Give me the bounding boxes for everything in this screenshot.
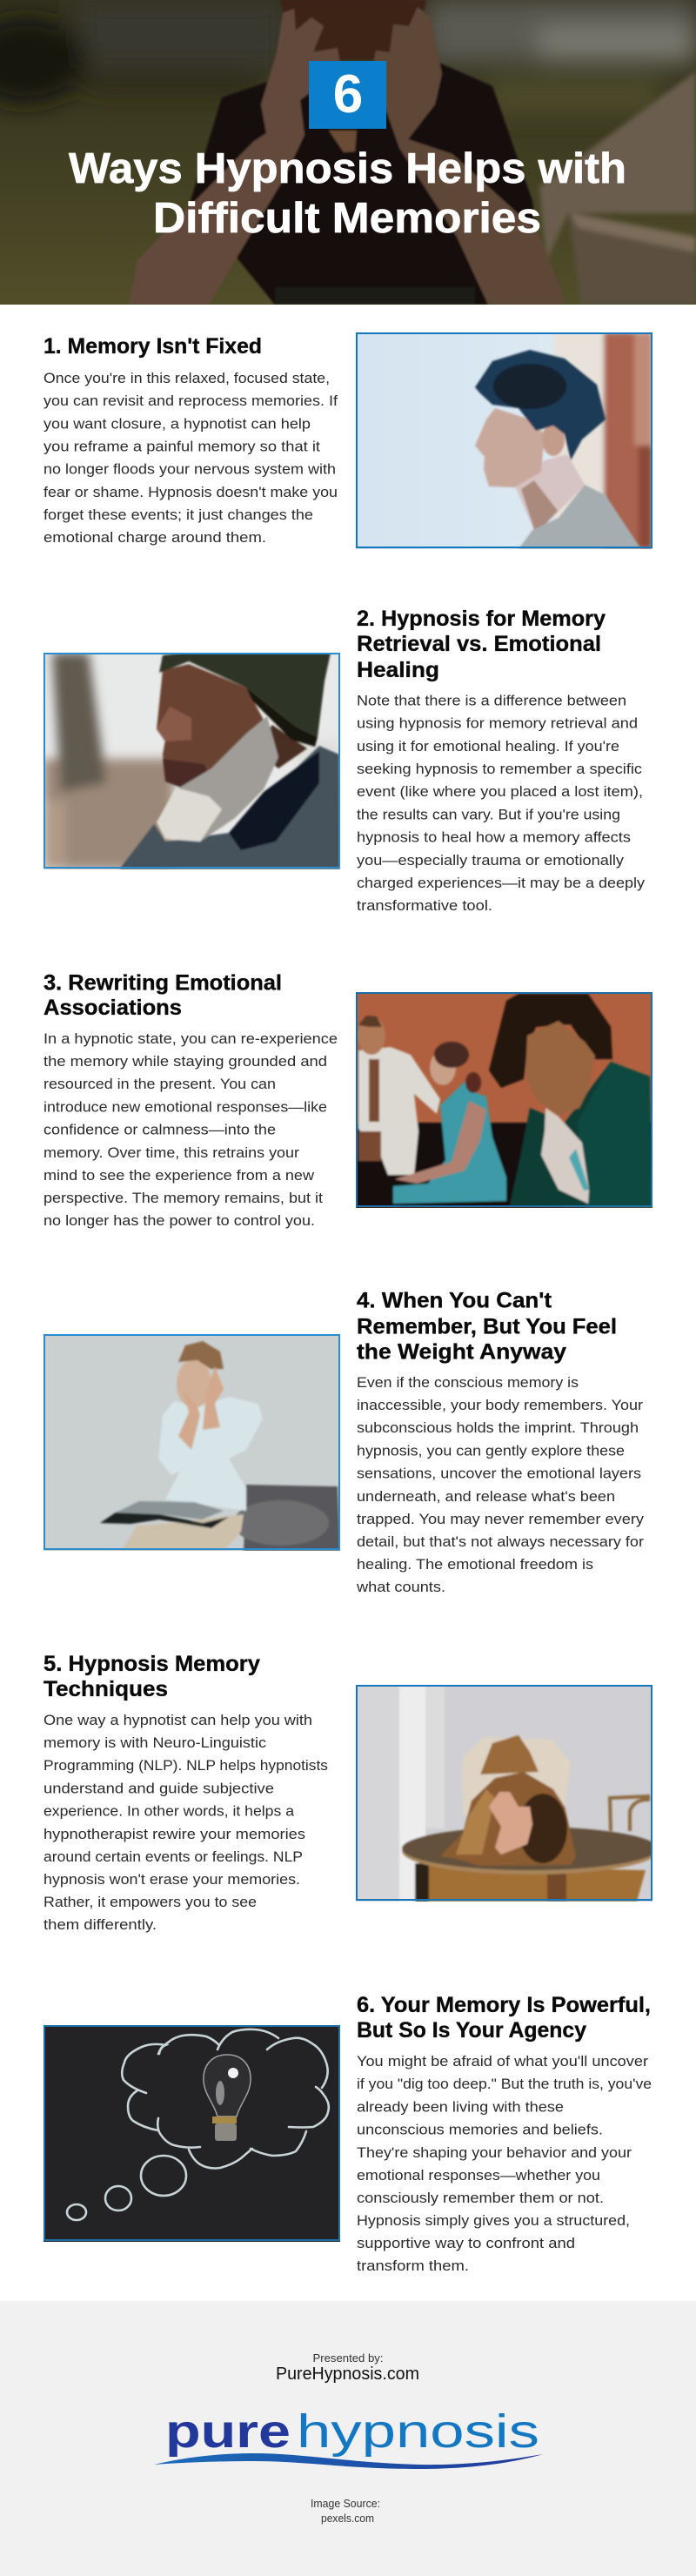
body text 5: them differently. [44,1916,157,1933]
photo: woman with head down on a table [356,1685,658,1902]
body text 3 [44,1030,338,1229]
body text 4: inaccessible, your body remembers. Your [357,1397,643,1413]
title: Difficult Memories [153,195,541,242]
heading 4: Remember, But You Feel [357,1314,617,1338]
body text 6: emotional responses—whether you [357,2167,600,2184]
body text 6 [357,2053,652,2274]
body text 2: the results can vary. But if you're using [357,806,620,822]
heading 5: 5. Hypnosis Memory [44,1652,260,1676]
heading 1: 1. Memory Isn't Fixed [44,334,262,359]
body text 5: experience. In other words, it helps a [44,1803,295,1820]
body text 3: the memory while staying grounded and [44,1053,327,1070]
body text 6: unconscious memories and beliefs. [357,2122,603,2138]
panel: section 3 [44,971,652,1229]
header photo: man holding his head [0,0,696,305]
number badge: 6 [333,64,363,124]
body text 1: you can revisit and reprocess memories. If [44,392,338,409]
body text 5 [44,1712,328,1933]
presented by text [276,2351,419,2384]
heading 3 [44,971,282,1020]
body text 3: In a hypnotic state, you can re-experience [44,1030,338,1047]
title: Ways Hypnosis Helps with [69,145,626,192]
body text 1: Once you're in this relaxed, focused state, [44,370,330,386]
body text 5: Rather, it empowers you to see [44,1894,257,1910]
photo: older man with grey beard [44,653,340,869]
body text 6: already been living with these [357,2098,564,2115]
logo: purehypnosis: hypnosis [297,2405,539,2458]
icon: light bulb [204,2055,251,2141]
photo: woman reading an album holding her head [44,1334,340,1551]
number badge [309,61,386,129]
heading 6: 6. Your Memory Is Powerful, [357,1993,651,2017]
body text 1: fear or shame. Hypnosis doesn't make you [44,484,338,500]
body text 2: you—especially trauma or emotionally [357,852,625,869]
body text 2: Note that there is a difference between [357,693,626,708]
heading 6 [357,1993,651,2043]
heading 6: But So Is Your Agency [357,2018,586,2043]
body text 4: what counts. [356,1579,445,1595]
heading 2: Healing [357,658,439,682]
body text 4 [356,1374,645,1595]
body text 5: around certain events or feelings. NLP [44,1848,303,1865]
body text 3: no longer has the power to control you. [44,1212,315,1229]
body text 5: understand and guide subjective [44,1781,274,1796]
body text 6: You might be afraid of what you'll uncover [357,2053,648,2070]
body text 4: underneath, and release what's been [357,1488,615,1505]
body text 5: One way a hypnotist can help you with [44,1712,312,1728]
logo: purehypnosis [154,2405,543,2469]
body text 4: healing. The emotional freedom is [357,1556,593,1573]
body text 4: sensations, uncover the emotional layers [357,1466,641,1482]
body text 1: emotional charge around them. [44,529,266,546]
heading 4: the Weight Anyway [357,1340,566,1365]
body text 1: forget these events; it just changes the [44,506,313,523]
body text 6: supportive way to confront and [357,2235,575,2251]
photo: man with eyes closed [356,332,652,549]
title [69,145,626,242]
heading 2: 2. Hypnosis for Memory [357,607,606,631]
heading 3: Associations [44,996,182,1020]
heading 3: 3. Rewriting Emotional [44,971,282,996]
heading 4 [357,1288,617,1365]
body text 6: consciously remember them or not. [357,2190,604,2206]
body text 3: resourced in the present. You can [44,1076,276,1092]
body text 2: transformative tool. [357,897,492,914]
body text 4: trapped. You may never remember every [357,1511,645,1527]
body text 6: Hypnosis simply gives you a structured, [357,2212,630,2229]
photo: chalk thought bubble with light bulb [44,2025,340,2242]
body text 6: if you "dig too deep." But the truth is, you've [357,2076,652,2092]
body text 2: using hypnosis for memory retrieval and [357,715,638,732]
body text 4: Even if the conscious memory is [357,1374,579,1391]
body text 2: seeking hypnosis to remember a specific [357,761,643,777]
body text 5: hypnosis won't erase your memories. [44,1871,300,1888]
heading 2: Retrieval vs. Emotional [357,632,601,656]
image source text [311,2497,380,2525]
body text 1 [44,370,338,546]
body text 1: you want closure, a hypnotist can help [44,415,311,432]
panel: section 6 [44,1993,652,2274]
presented by text: PureHypnosis.com [276,2365,419,2384]
body text 5: hypnotherapist rewire your memories [44,1826,305,1842]
body text 3: memory. Over time, this retrains your [44,1144,299,1161]
photo: woman looking away from two people [356,992,652,1208]
footer panel [0,2301,696,2576]
panel: section 1 [44,332,652,549]
body text 2 [357,693,646,914]
body text 6: They're shaping your behavior and your [357,2144,632,2161]
heading 5: Techniques [44,1677,168,1701]
image source text: Image Source: [311,2497,380,2510]
panel: section 4 [44,1288,645,1595]
body text 3: perspective. The memory remains, but it [44,1190,323,1206]
body text 2: charged experiences—it may be a deeply [357,875,646,891]
body text 4: subconscious holds the imprint. Through [357,1419,639,1436]
body text 1: no longer floods your nervous system with [44,461,336,478]
body text 2: event (like where you placed a lost item), [357,783,643,800]
presented by text: Presented by: [313,2351,383,2365]
body text 4: hypnosis, you can gently explore these [357,1443,625,1459]
heading 2 [357,607,606,682]
body text 3: confidence or calmness—into the [44,1122,276,1138]
body text 6: transform them. [357,2257,469,2274]
logo: purehypnosis: pure [165,2405,291,2458]
body text 4: detail, but that's not always necessary for [357,1533,644,1550]
body text 1: you reframe a painful memory so that it [44,439,320,454]
heading 5 [44,1652,260,1701]
body text 3: mind to see the experience from a new [44,1167,315,1184]
body text 5: memory is with Neuro-Linguistic [44,1734,267,1751]
panel: section 5 [44,1652,658,1933]
body text 2: using it for emotional healing. If you're [357,738,619,755]
body text 3: introduce new emotional responses—like [44,1098,327,1116]
header banner [0,0,696,305]
panel: section 2 [44,607,646,914]
body text 2: hypnosis to heal how a memory affects [357,829,631,846]
heading 4: 4. When You Can't [357,1288,552,1312]
image source text: pexels.com [321,2512,374,2525]
body text 5: Programming (NLP). NLP helps hypnotists [44,1757,328,1774]
